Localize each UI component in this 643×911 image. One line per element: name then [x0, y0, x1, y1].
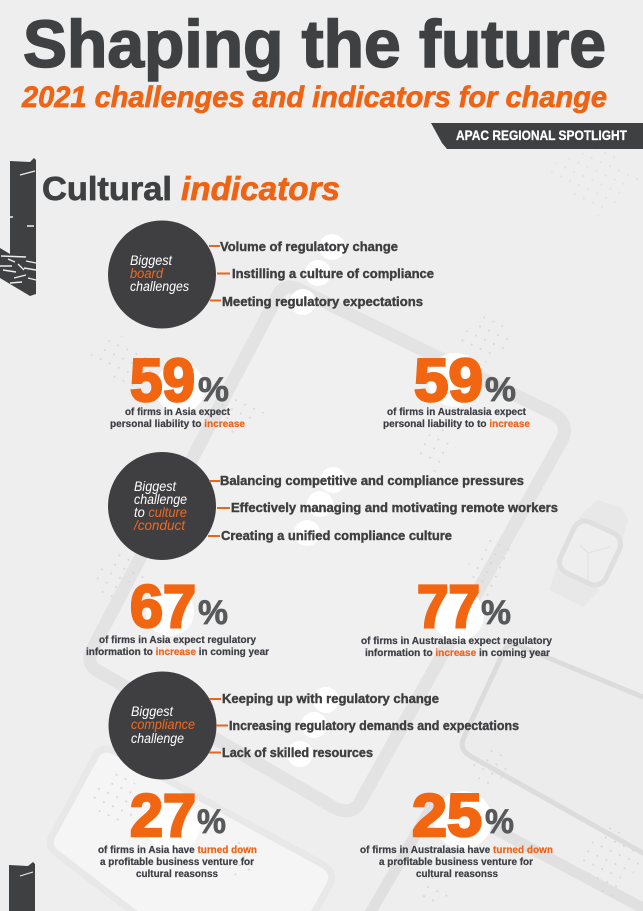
stat: 27% Asia: %: [197, 803, 226, 841]
list: culture challenges: Effectively managing and motivating remote workers: [231, 501, 558, 515]
stat: 25% Australasia: 25: [412, 782, 482, 849]
circle label: culture/conduct: [108, 452, 216, 560]
stat: 67% Asia: 67: [130, 573, 196, 640]
stat: 25% Australasia: of firms in Australasia have turned down: [360, 845, 553, 856]
stat: 67% Asia: information to increase in coming year: [86, 647, 269, 658]
stat: 77% Australasia: information to increase in coming year: [365, 648, 550, 659]
list: compliance challenges: [209, 692, 519, 760]
stat: 59% Asia: 59: [130, 347, 195, 414]
stat: 59% Asia: %: [198, 371, 229, 409]
heading: Cultural indicators: indicators: [181, 170, 340, 207]
heading: Cultural indicators: Cultural: [42, 170, 172, 207]
circle label: culture/conduct: to culture: [134, 505, 187, 520]
stat: 77% Australasia: %: [481, 594, 511, 632]
circle label: culture/conduct: Biggest: [134, 479, 177, 494]
stat: 77% Australasia: [361, 573, 553, 659]
dot pattern textures: [85, 140, 643, 910]
white highlight blobs: [146, 234, 492, 852]
stat: 77% Australasia: of firms in Australasia expect regulatory: [361, 636, 553, 647]
list: board challenges: Volume of regulatory change: [220, 240, 398, 254]
stat: 25% Australasia: %: [485, 803, 514, 841]
decorative bottom ribbon: [9, 862, 35, 911]
stat: 25% Australasia: a profitable business venture for: [379, 857, 533, 868]
panel: biggest board challenges: [108, 220, 434, 328]
stat: 25% Australasia: [360, 782, 553, 880]
decorative side ribbon: [0, 158, 36, 296]
stat: 27% Asia: 27: [130, 782, 196, 849]
stat: 59% Australasia: of firms in Australasia expect: [387, 407, 527, 418]
panel: biggest challenge to culture/conduct: [108, 452, 558, 560]
list: board challenges: [209, 240, 434, 309]
stat: 67% Asia: %: [198, 594, 228, 632]
stat: 27% Asia: of firms in Asia have turned down: [98, 845, 257, 856]
stat: 59% Australasia: personal liability to to increase: [383, 419, 531, 430]
stat: 25% Australasia: cultural reasonss: [416, 869, 499, 880]
list: culture challenges: Creating a unified compliance culture: [221, 529, 452, 543]
circle label: board challenges: [108, 220, 216, 328]
background device illustrations: [50, 287, 643, 911]
stat: 59% Asia: personal liability to increase: [110, 419, 246, 430]
heading: Cultural indicators: [42, 170, 340, 207]
stat: 59% Australasia: 59: [414, 347, 483, 414]
stat: 67% Asia: of firms in Asia expect regulatory: [99, 635, 257, 646]
stat: 59% Australasia: [383, 347, 531, 430]
stat: 67% Asia: [86, 573, 269, 658]
stat: 59% Asia: [110, 347, 246, 430]
stat: 27% Asia: a profitable business venture for: [100, 857, 254, 868]
banner: APAC regional spotlight: [431, 123, 643, 149]
list: compliance challenges: Increasing regulatory demands and expectations: [229, 719, 519, 733]
title: Shaping the future: [23, 7, 606, 82]
stat: 77% Australasia: 77: [417, 573, 480, 640]
list: compliance challenges: Lack of skilled resources: [222, 746, 373, 760]
list: board challenges: Meeting regulatory expectations: [222, 295, 423, 309]
list: compliance challenges: Keeping up with regulatory change: [222, 692, 439, 706]
list: culture challenges: Balancing competitive and compliance pressures: [220, 474, 524, 488]
subtitle: 2021 challenges and indicators for change: [21, 81, 607, 114]
panel: biggest compliance challenge: [108, 672, 519, 780]
circle label: compliance challenge: Biggest: [131, 704, 174, 719]
circle label: board challenges: board: [130, 266, 163, 281]
stat: 27% Asia: cultural reasonss: [136, 869, 219, 880]
circle label: board challenges: Biggest: [130, 253, 173, 268]
stat: 27% Asia: [98, 782, 257, 880]
list: board challenges: Instilling a culture of compliance: [232, 267, 434, 281]
circle label: compliance challenge: challenge: [131, 731, 184, 746]
circle label: board challenges: challenges: [130, 279, 189, 294]
circle label: culture/conduct: challenge: [134, 492, 187, 507]
stat: 59% Asia: of firms in Asia expect: [125, 407, 231, 418]
circle label: compliance challenge: compliance: [131, 717, 195, 732]
circle label: culture/conduct: /conduct: [133, 518, 186, 533]
stat: 59% Australasia: %: [485, 371, 516, 409]
icon: smartwatch: [549, 500, 628, 607]
circle label: compliance challenge: [108, 672, 216, 780]
list: culture challenges: [208, 474, 558, 543]
